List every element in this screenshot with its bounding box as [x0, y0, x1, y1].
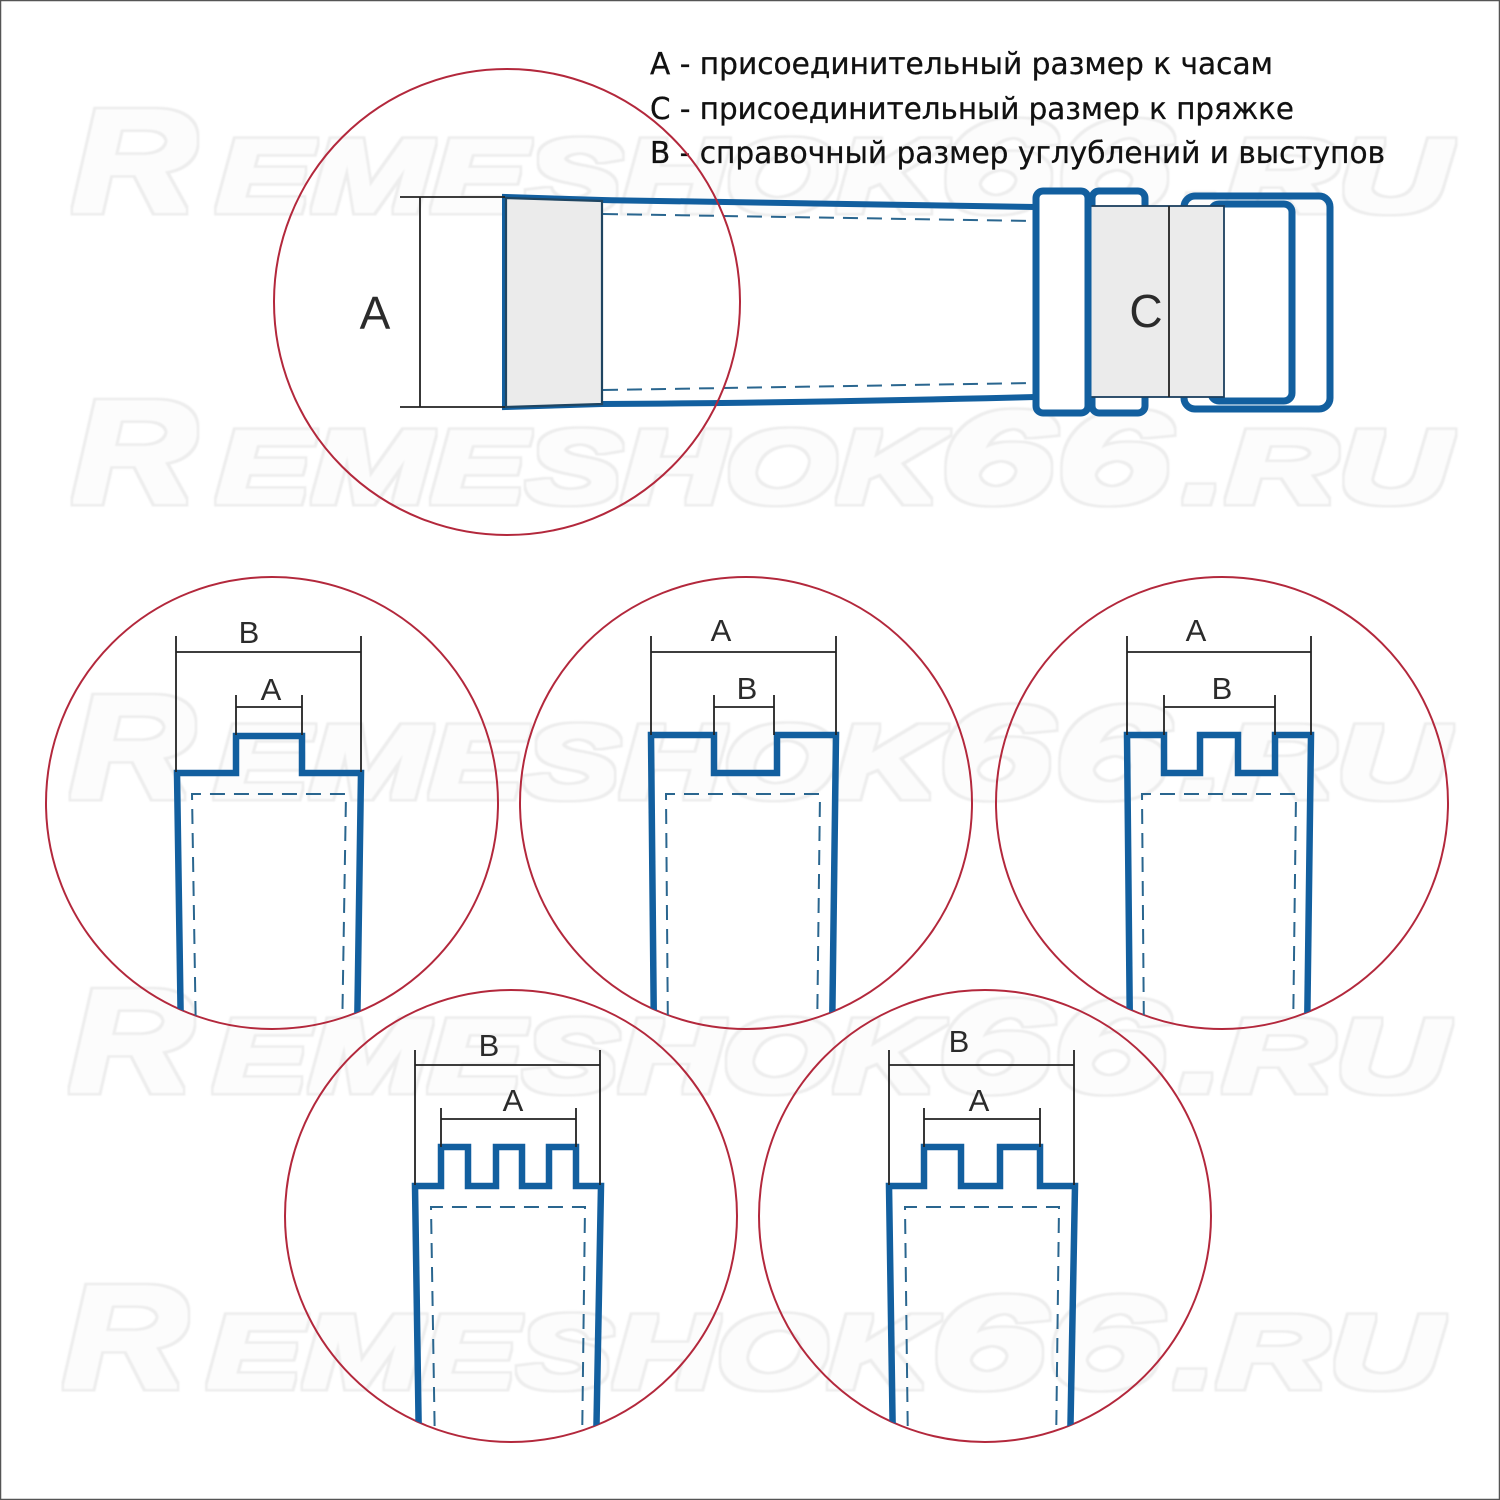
strap stitching	[603, 214, 1032, 390]
stitching	[192, 794, 346, 1040]
legend text block: А - присоединительный размер к часам	[650, 47, 1273, 82]
dimensions	[889, 1050, 1074, 1185]
watermark text rows: 66	[939, 386, 1173, 530]
strap end outline	[651, 735, 836, 1040]
watermark text rows: R	[70, 666, 194, 828]
watermark text rows: .RU	[1182, 119, 1454, 233]
label A: A	[503, 1083, 524, 1118]
watermark text rows: EMESHOK	[213, 999, 946, 1113]
label A: A	[969, 1083, 990, 1118]
watermark text rows: EMESHOK	[207, 1295, 940, 1409]
second keeper loop	[1092, 191, 1145, 413]
red circle	[520, 577, 972, 1029]
strap end outline	[889, 1147, 1075, 1450]
buckle outer frame	[1184, 196, 1330, 409]
watermark text rows: .RU	[1179, 999, 1451, 1113]
dimensions	[651, 636, 836, 735]
red circle	[759, 990, 1211, 1442]
first keeper loop	[1036, 191, 1088, 413]
label B: B	[949, 1024, 969, 1059]
label B: B	[1212, 671, 1232, 706]
buckle inner frame	[1211, 204, 1292, 401]
strap outline	[505, 197, 1035, 407]
strap end outline	[1127, 735, 1311, 1040]
strap end outline	[177, 736, 361, 1040]
panel: strap with single notch	[520, 577, 972, 1040]
red circle	[285, 990, 737, 1442]
panel: strap with two tabs	[759, 990, 1211, 1450]
watermark text rows: EMESHOK	[214, 705, 947, 819]
red magnifier circle	[274, 69, 740, 535]
legend text block	[650, 47, 1385, 171]
label C: C	[1129, 285, 1163, 337]
watermark text rows: 66	[936, 975, 1170, 1119]
watermark text rows: EMESHOK	[216, 410, 949, 524]
dimensions	[415, 1050, 600, 1185]
stitching	[666, 794, 820, 1040]
red circle	[996, 577, 1448, 1029]
stitching	[1142, 794, 1296, 1040]
panel: full strap with buckle	[274, 69, 1330, 535]
grey attachment zone C	[1090, 206, 1224, 397]
legend text block: В - справочный размер углублений и выступов	[650, 136, 1385, 171]
label A: A	[261, 672, 282, 707]
watermark text rows: EMESHOK	[216, 119, 949, 233]
watermark text rows: 66	[930, 1271, 1164, 1415]
panel: strap with three tabs	[285, 990, 737, 1450]
watermark text rows: R	[63, 1256, 187, 1418]
label A: A	[360, 287, 391, 339]
dimension A	[400, 197, 505, 407]
grey attachment zone A	[506, 198, 602, 407]
watermark text rows: R	[72, 371, 196, 533]
watermark text rows: .RU	[1173, 1295, 1445, 1409]
strap end outline	[415, 1147, 601, 1450]
label B: B	[737, 671, 757, 706]
label A: A	[711, 613, 732, 648]
label B: B	[479, 1028, 499, 1063]
dimensions	[176, 636, 361, 772]
red circle	[46, 577, 498, 1029]
stitching	[431, 1207, 585, 1450]
watermark text rows: 66	[937, 681, 1171, 825]
watermark text rows: R	[69, 960, 193, 1122]
fold line	[1168, 206, 1170, 397]
panel: strap with two notches	[996, 577, 1448, 1040]
watermark text rows: 66	[939, 95, 1173, 239]
watermark text rows: R	[72, 80, 196, 242]
dimensions	[1127, 636, 1311, 735]
label B: B	[239, 615, 259, 650]
panel: strap with single tab	[46, 577, 498, 1040]
legend text block: С - присоединительный размер к пряжке	[650, 92, 1294, 127]
watermark text rows: .RU	[1182, 410, 1454, 524]
label A: A	[1186, 613, 1207, 648]
watermark text rows: .RU	[1180, 705, 1452, 819]
stitching	[905, 1207, 1059, 1450]
